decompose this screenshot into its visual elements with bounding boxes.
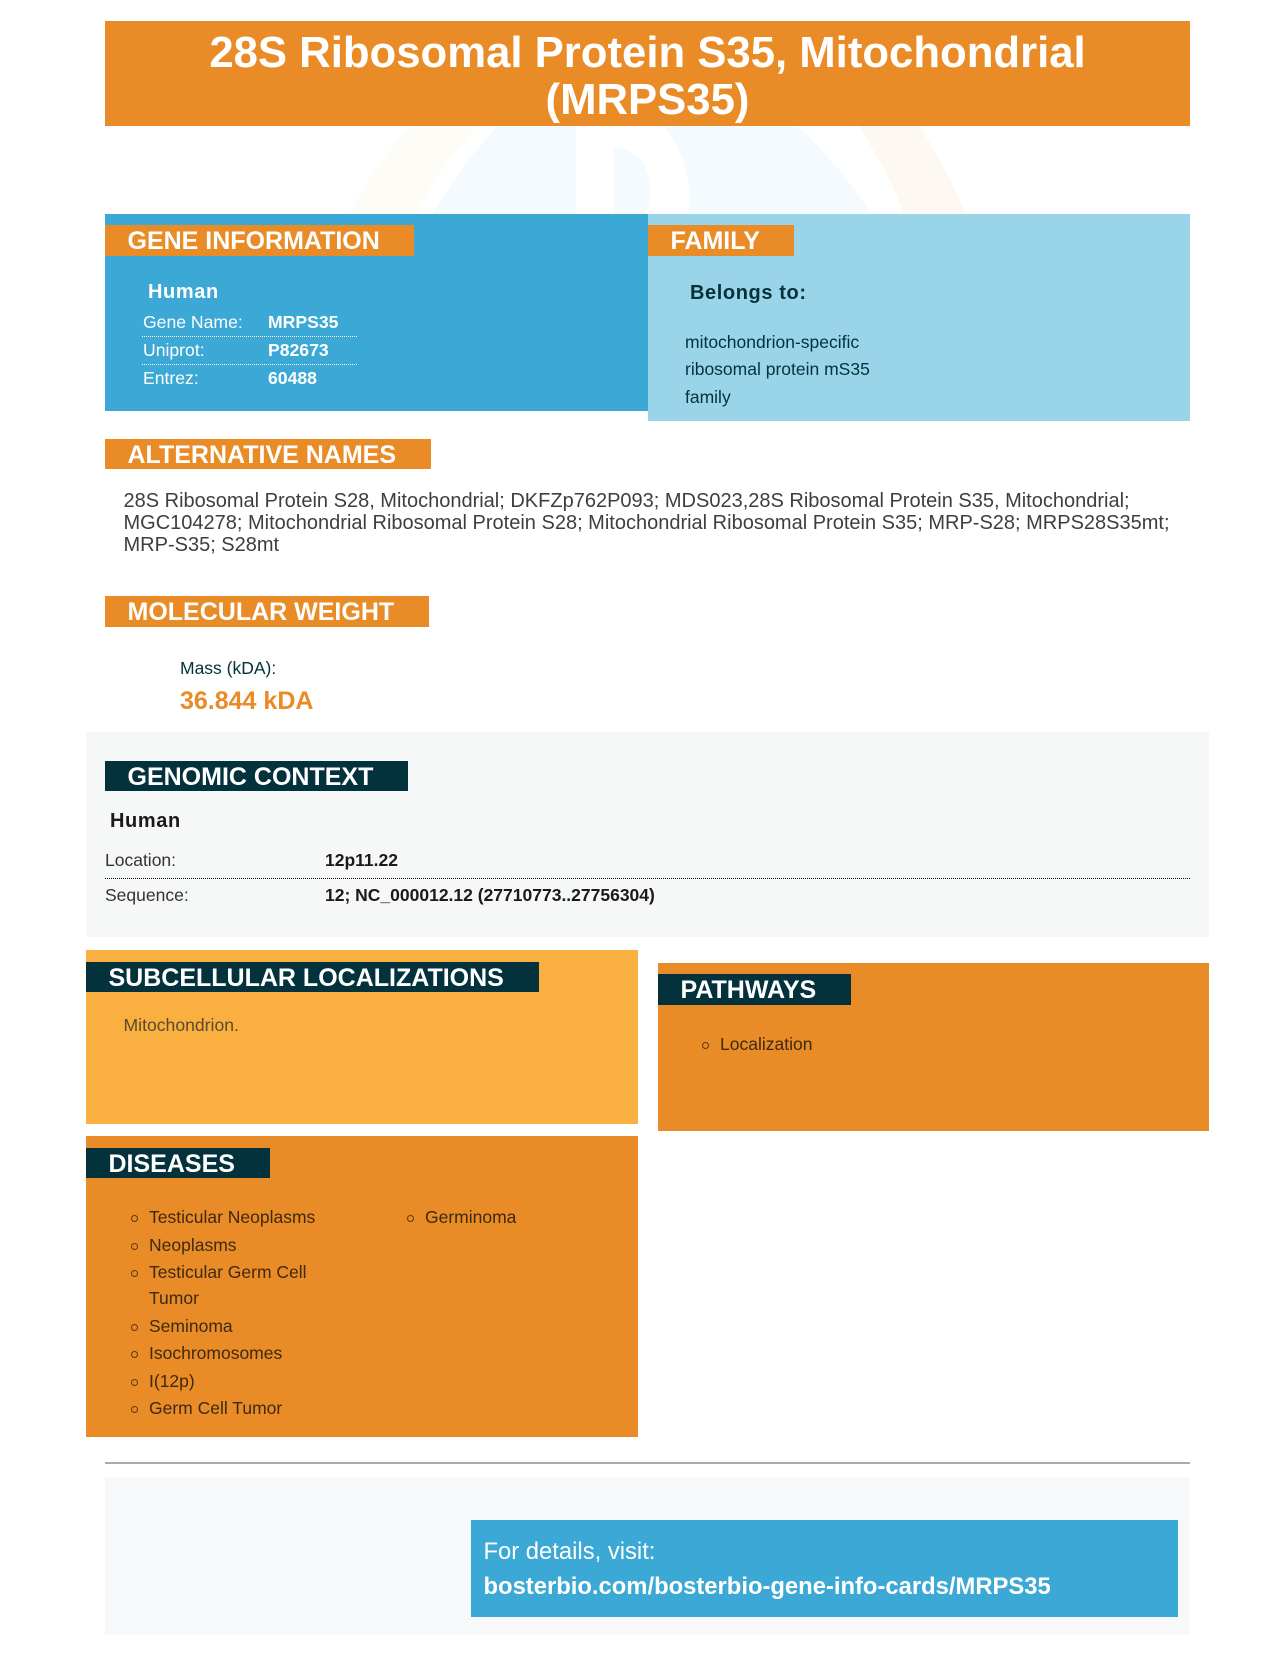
localization text: Mitochondrion. (124, 1015, 239, 1035)
heading: molecular weight: MOLECULAR WEIGHT (128, 598, 394, 626)
mass value: 36.844 kDA (180, 687, 313, 715)
disease list: Neoplasms (149, 1235, 237, 1255)
title banner: 28S Ribosomal Protein S35, Mitochondrial (209, 28, 1086, 76)
title banner (105, 21, 1190, 126)
family description (685, 332, 870, 407)
disease list: Germinoma (425, 1207, 516, 1227)
heading: family (648, 225, 794, 256)
disease list: Germ Cell Tumor (149, 1398, 282, 1418)
family description: family (685, 387, 731, 407)
location row: Location: (105, 850, 176, 870)
entrez row (143, 368, 317, 388)
panel: family (648, 214, 1190, 421)
panel: diseases (86, 1136, 638, 1437)
disease list: Tumor (149, 1288, 199, 1308)
mass label: Mass (kDA): (180, 658, 276, 678)
sequence row: Sequence: (105, 885, 189, 905)
disease list: I(12p) (149, 1371, 195, 1391)
entrez row: 60488 (268, 368, 317, 388)
callout: details link (471, 1520, 1178, 1617)
heading: alternative names: ALTERNATIVE NAMES (128, 441, 396, 469)
species label: Human (148, 281, 219, 303)
watermark logo (350, 126, 966, 214)
panel: footer (105, 1477, 1190, 1635)
uniprot row (142, 339, 357, 365)
disease list: Seminoma (149, 1316, 233, 1336)
sequence row (105, 885, 655, 905)
panel: pathways (658, 963, 1209, 1131)
species label: Human (110, 810, 181, 832)
heading: genomic context: GENOMIC CONTEXT (128, 763, 373, 791)
heading: gene information: GENE INFORMATION (128, 227, 380, 255)
gene name row (142, 311, 357, 337)
disease list: Isochromosomes (149, 1343, 282, 1363)
divider (105, 1462, 1190, 1464)
heading: pathways (658, 974, 851, 1005)
location row: 12p11.22 (325, 850, 398, 870)
heading: family: FAMILY (670, 227, 760, 255)
gene name row: Gene Name: (143, 312, 243, 332)
panel: genomic context (86, 732, 1209, 937)
family description: mitochondrion-specific (685, 332, 859, 352)
disease list: Testicular Neoplasms (149, 1207, 315, 1227)
heading: subcellular localizations: SUBCELLULAR LOCALIZATIONS (108, 964, 504, 992)
heading: diseases: DISEASES (108, 1150, 235, 1178)
sequence row: 12; NC_000012.12 (27710773..27756304) (325, 885, 655, 905)
pathway item: Localization (720, 1034, 812, 1054)
molecular weight value (180, 658, 313, 715)
gene name row: MRPS35 (268, 312, 338, 332)
heading: pathways: PATHWAYS (680, 976, 816, 1004)
alternative names text (124, 490, 1170, 556)
family description: ribosomal protein mS35 (685, 359, 870, 379)
callout label: For details, visit: (484, 1538, 655, 1565)
belongs to label: Belongs to: (690, 282, 807, 304)
disease list (131, 1207, 516, 1418)
alternative names text: 28S Ribosomal Protein S28, Mitochondrial; DKFZp762P093; MDS023,28S Ribosomal Protein S35, Mitochondrial; (124, 490, 1130, 512)
panel: subcellular localizations (86, 950, 638, 1124)
alternative names text: MGC104278; Mitochondrial Ribosomal Protein S28; Mitochondrial Ribosomal Protein S35; MRP-S28; MRPS28S35mt; (124, 512, 1170, 534)
uniprot row: Uniprot: (143, 340, 205, 360)
disease list: Testicular Germ Cell (149, 1262, 307, 1282)
callout url: bosterbio.com/bosterbio-gene-info-cards/MRPS35 (484, 1573, 1051, 1600)
panel: gene information (105, 214, 648, 411)
title banner: (MRPS35) (546, 75, 749, 124)
location row (105, 848, 1190, 879)
uniprot row: P82673 (268, 340, 329, 360)
alternative names text: MRP-S35; S28mt (124, 534, 279, 556)
entrez row: Entrez: (143, 368, 199, 388)
heading: diseases (86, 1148, 270, 1178)
